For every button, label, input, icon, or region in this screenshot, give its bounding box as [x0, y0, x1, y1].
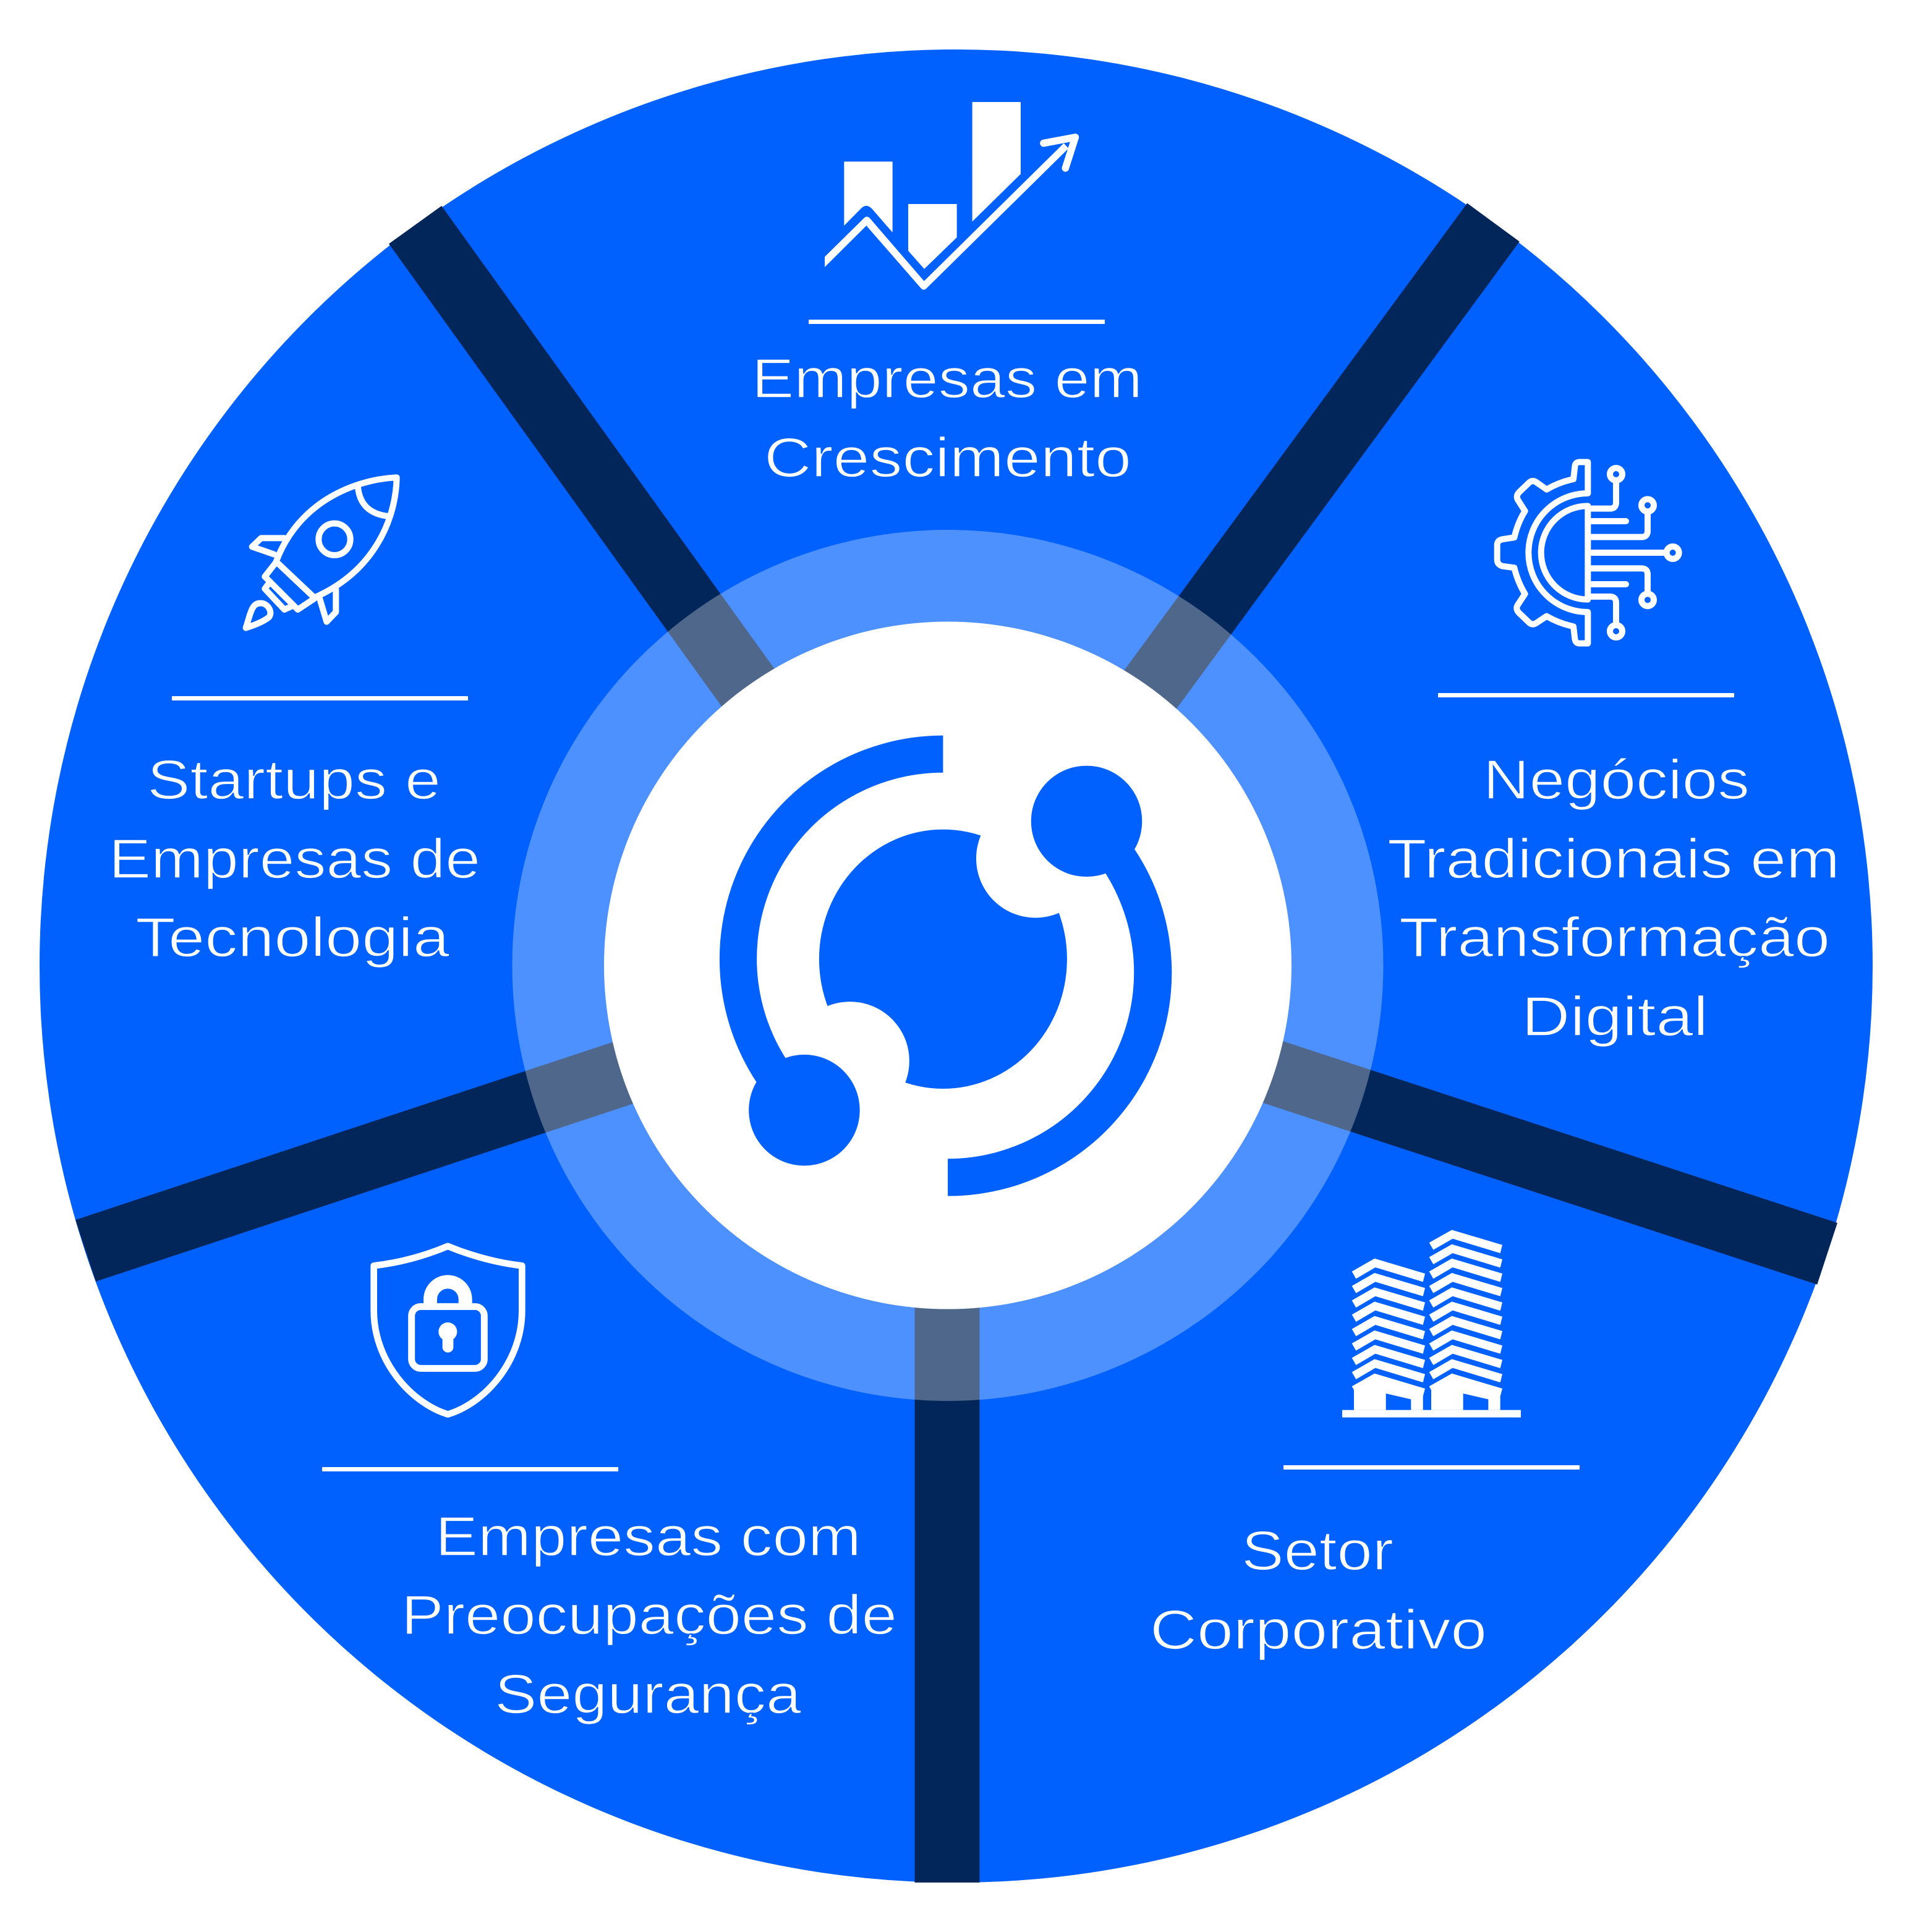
heading: Empresas em Crescimento: Crescimento	[764, 427, 1131, 489]
divider: corporate	[1283, 1465, 1580, 1470]
heading: Setor Corporativo	[1150, 1520, 1487, 1661]
icon: digital gear	[1497, 462, 1679, 644]
heading: Startups e Empresas de Tecnologia	[109, 749, 480, 969]
divider: security	[322, 1467, 618, 1471]
heading: Startups e Empresas de Tecnologia: Tecnologia	[135, 907, 450, 969]
translucent inner ring	[512, 530, 1384, 1401]
central logo	[720, 736, 1172, 1196]
heading: Empresas com Preocupações de Segurança	[401, 1506, 897, 1726]
heading: Negócios Tradicionais em Transformação Digital: Tradicionais em	[1387, 828, 1840, 890]
heading: Negócios Tradicionais em Transformação Digital: Digital	[1521, 986, 1708, 1048]
heading: Negócios Tradicionais em Transformação Digital: Transformação	[1399, 907, 1830, 969]
heading: Empresas com Preocupações de Segurança: Empresas com	[435, 1506, 861, 1568]
icon: shield lock	[374, 1246, 522, 1415]
divider: growth	[809, 320, 1105, 324]
icon: buildings	[1342, 1230, 1521, 1418]
heading: Empresas com Preocupações de Segurança: Preocupações de	[401, 1585, 897, 1646]
heading: Startups e Empresas de Tecnologia: Empresas de	[109, 828, 480, 890]
heading: Empresas em Crescimento: Empresas em	[752, 348, 1143, 410]
divider: startups	[172, 696, 468, 700]
icon: growth chart	[825, 102, 1075, 290]
heading: Empresas em Crescimento	[752, 348, 1143, 489]
heading: Negócios Tradicionais em Transformação Digital: Negócios	[1483, 749, 1750, 811]
heading: Startups e Empresas de Tecnologia: Startups e	[147, 749, 441, 811]
white centre circle	[604, 622, 1292, 1309]
heading: Negócios Tradicionais em Transformação Digital	[1387, 749, 1840, 1048]
heading: Setor Corporativo: Corporativo	[1150, 1599, 1487, 1661]
heading: Empresas com Preocupações de Segurança: Segurança	[495, 1664, 802, 1726]
icon: rocket	[246, 477, 397, 628]
heading: Setor Corporativo: Setor	[1241, 1520, 1394, 1582]
dark spokes	[85, 223, 1828, 1883]
divider: digital	[1438, 693, 1734, 697]
